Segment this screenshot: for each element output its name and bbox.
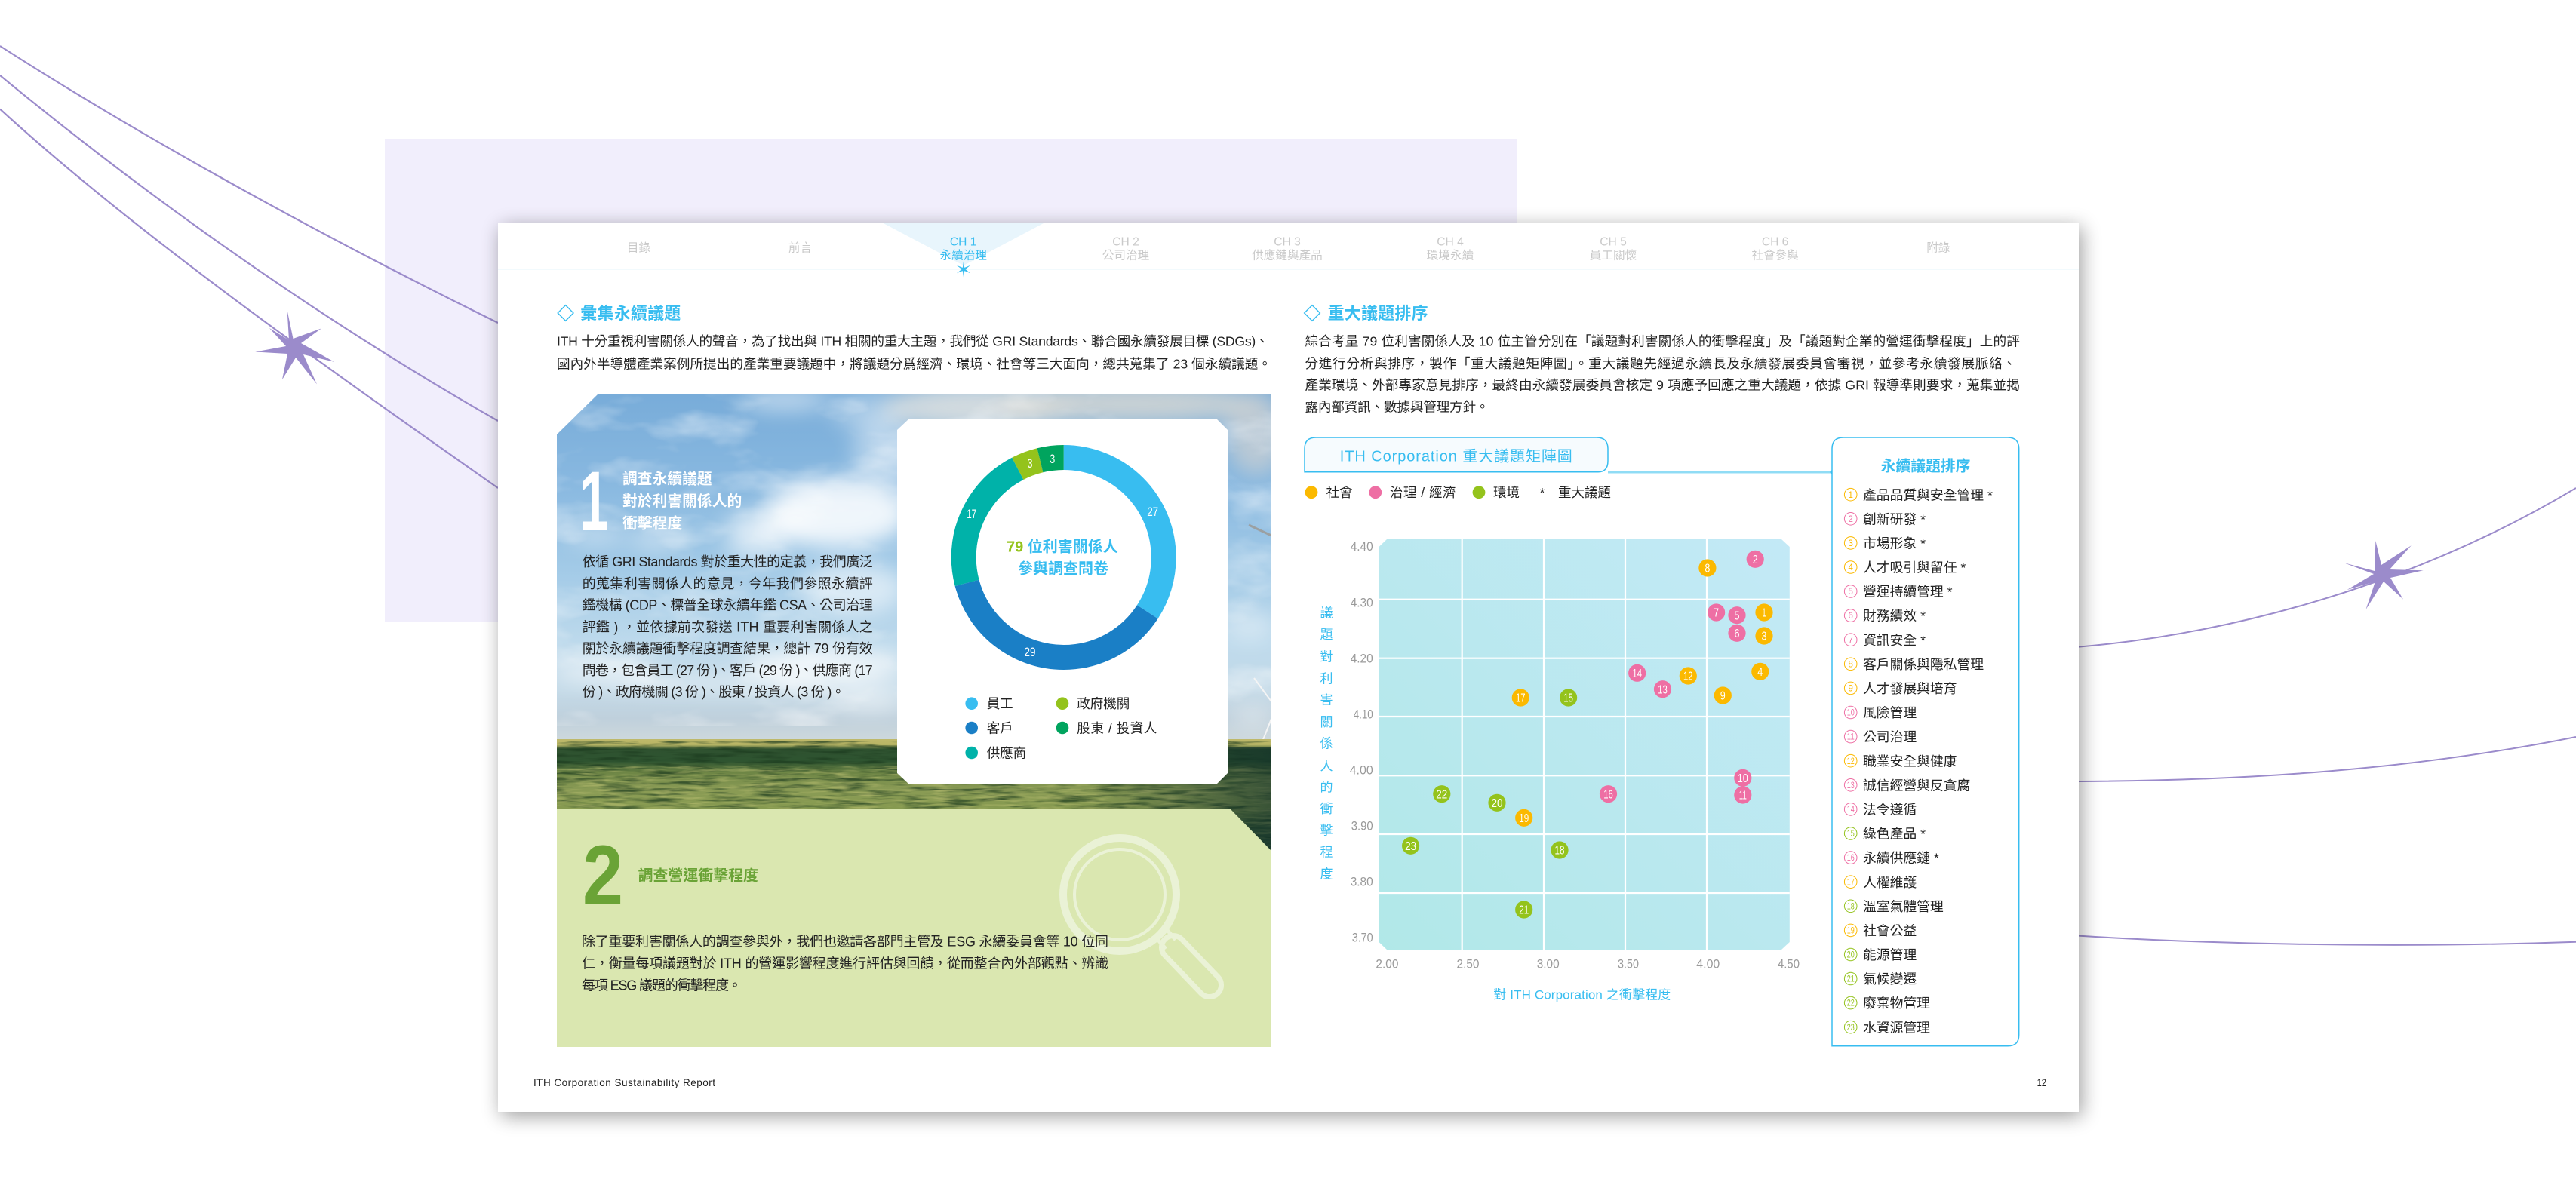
y axis title: 對 [1320,649,1333,664]
point 1: 1 [1763,607,1766,620]
nav item: chapter 1 active: 永續治理 [940,249,987,262]
nav item: preface: 前言 [788,241,812,255]
y axis labels: 3.80 [1351,874,1373,889]
point 14 [1628,664,1646,682]
matrix legend: 社會 [1326,485,1352,500]
item 23: 23 [1847,1024,1855,1033]
item 22: 廢棄物管理 [1863,996,1930,1011]
nav item: chapter 2: 公司治理 [1102,249,1150,262]
matrix legend: * [1539,485,1545,500]
step 2 number: 2 [583,828,623,922]
step 1 text block: 依循 GRI Standards 對於重大性的定義，我們廣泛 [583,554,873,569]
item 3: 3 [1848,539,1853,548]
donut value labels: 17 [967,507,976,521]
point 19 [1515,809,1532,827]
item 1: 1 [1848,491,1853,500]
nav item: chapter 1 active: CH 1 [950,235,976,249]
point 20: 20 [1491,797,1503,810]
donut legend: 員工 [987,696,1013,711]
step 1 text block: 問卷，包含員工 (27 份 )、客戶 (29 份 )、供應商 (17 [583,662,873,678]
icon: right purple star [2344,541,2424,609]
y axis labels: 4.00 [1350,763,1373,777]
nav item: appendix: 附錄 [1926,241,1950,255]
item 1: 產品品質與安全管理 * [1863,487,1993,502]
step 1 text block: 關於永續議題衝擊程度調查結果，總計 79 份有效 [583,641,873,656]
item 3: 市場形象 * [1863,536,1926,551]
scatter chart: materiality matrix [1320,539,1800,1002]
text block: gather topics intro [557,333,1271,371]
y axis title: 議 [1320,606,1333,620]
step 2 heading: 調查營運衝擊程度 [638,867,758,884]
point 21: 21 [1519,904,1529,917]
point 17 [1512,689,1529,707]
donut legend: 政府機關 [1077,696,1130,711]
item 11: 11 [1847,733,1855,742]
nav item: chapter 4: CH 4 [1437,235,1464,249]
point 17: 17 [1516,692,1526,705]
step 1 text block: 鑑機構 (CDP、標普全球永續年鑑 CSA、公司治理 [583,598,873,613]
donut value labels: 3 [1050,452,1055,466]
x axis labels: 2.00 [1376,956,1398,971]
point 5 [1728,606,1746,624]
step 1 heading [622,471,742,533]
item 11: 公司治理 [1863,729,1917,744]
nav item: chapter 1 active [940,235,987,262]
page shadow [501,227,2082,1116]
item 6: 財務績效 * [1863,609,1926,624]
icon: active chapter star [957,261,970,278]
list title: 永續議題排序 [1881,457,1970,475]
item 21: 氣候變遷 [1863,971,1917,987]
step 2 text block [582,934,1108,993]
item 4: 4 [1848,563,1853,572]
step 1 text block: 評鑑 ) ，並依據前次發送 ITH 重要利害關係人之 [583,618,873,634]
y axis title: 衝 [1320,802,1333,816]
y axis title: 害 [1320,693,1333,707]
matrix legend: 重大議題 [1558,485,1611,500]
y axis title: 係 [1320,735,1333,750]
donut legend: 供應商 [987,745,1026,760]
nav item: chapter 2: CH 2 [1112,235,1139,249]
point 22: 22 [1436,788,1447,801]
donut legend: 股東 / 投資人 [1077,721,1157,736]
y axis labels: 4.30 [1351,596,1373,610]
item 15: 綠色產品 * [1863,827,1926,842]
navigation bar [498,223,2079,278]
item 22: 22 [1847,999,1855,1008]
item 23: 水資源管理 [1863,1020,1930,1035]
item 4: 人才吸引與留任 * [1863,560,1966,575]
item 9: 9 [1848,685,1853,694]
point 3 [1755,627,1773,645]
decorative curved lines left [0,46,498,488]
nav item: chapter 5: 員工關懷 [1590,249,1637,262]
text block: gather topics intro: ITH 十分重視利害關係人的聲音，為了找出與 ITH 相關的重大主題，我們從 GRI Standards、聯合國永續發展目標 (SDGs)、 [557,333,1269,348]
point 8: 8 [1705,563,1710,575]
item 5: 營運持續管理 * [1863,585,1953,600]
heading: material topic ranking: 重大議題排序 [1328,304,1428,323]
donut value labels: 3 [1028,456,1032,471]
point 11: 11 [1739,790,1747,803]
x axis labels: 4.00 [1696,956,1720,971]
item 12: 職業安全與健康 [1863,753,1957,769]
item 6: 6 [1848,612,1853,621]
point 7 [1708,603,1725,622]
point 19: 19 [1519,812,1529,825]
point 8 [1698,559,1716,577]
donut legend: 客戶 [987,721,1013,736]
nav item: chapter 5: CH 5 [1600,235,1627,249]
nav item: chapter 6 [1751,235,1799,262]
y axis labels: 4.10 [1354,707,1373,722]
matrix legend: 治理 / 經濟 [1390,485,1456,500]
point 12: 12 [1683,671,1693,683]
step 1 text block: 份 )、政府機關 (3 份 )、股東 / 投資人 (3 份 )。 [583,685,845,700]
item 16: 永續供應鏈 * [1863,850,1939,866]
donut center text: 參與調查問卷 [1018,560,1108,578]
photo: sky and grass with wind turbines [551,385,1286,850]
nav item: chapter 3 [1252,235,1323,262]
donut value labels: 29 [1025,645,1035,659]
point 16: 16 [1603,788,1613,801]
step 2 text block: 每項 ESG 議題的衝擊程度。 [582,978,742,993]
y axis labels: 3.90 [1351,818,1373,833]
text block: gather topics intro: 國內外半導體產業案例所提出的產業重要議題中，將議題分爲經濟、環境、社會等三大面向，總共蒐集了 23 個永續議題。 [557,356,1271,371]
step 1 heading: 對於利害關係人的 [622,493,742,510]
step 2 text block: 仁，衡量每項議題對於 ITH 的營運影響程度進行評估與回饋，從而整合內外部觀點、辨識 [582,956,1108,971]
page [498,223,2079,1112]
panel: step 2 green [557,809,1271,1047]
point 23 [1402,837,1419,855]
item 5: 5 [1848,588,1853,597]
point 6 [1728,625,1746,642]
item 2: 創新研發 * [1863,511,1926,526]
matrix legend: 環境 [1493,485,1520,500]
item 19: 社會公益 [1863,923,1917,938]
point 18: 18 [1554,845,1565,858]
nav item: chapter 3: CH 3 [1274,235,1301,249]
y axis title: 程 [1320,845,1333,859]
item 18: 溫室氣體管理 [1863,899,1944,914]
lavender backdrop panel [385,139,1517,622]
y axis title: 關 [1320,715,1333,729]
point 7: 7 [1714,607,1719,620]
point 3: 3 [1761,631,1767,643]
heading: gather topics: 彙集永續議題 [580,304,681,323]
x axis labels: 3.00 [1537,956,1560,971]
x axis labels: 2.50 [1456,956,1479,971]
y axis labels: 3.70 [1352,930,1373,944]
item 17: 17 [1847,878,1855,887]
nav item: contents: 目錄 [627,241,650,255]
y axis labels [1350,539,1373,944]
step 1 heading: 調查永續議題 [622,471,712,487]
donut legend [965,696,1157,760]
footer page number: 12 [2037,1077,2046,1088]
y axis title [1320,606,1333,881]
point 4: 4 [1757,666,1763,679]
y axis title: 度 [1320,867,1333,881]
y axis title: 利 [1320,671,1333,686]
item 14: 法令遵循 [1863,803,1917,818]
y axis labels: 4.20 [1351,652,1373,666]
text block: ranking intro: 綜合考量 79 位利害關係人及 10 位主管分別在「議題對利害關係人的衝擊程度」及「議題對企業的營運衝擊程度」上的評 [1305,333,2020,348]
step 1 text block [583,554,873,700]
point 11 [1734,786,1751,804]
text block: ranking intro: 露內部資訊、數據與管理方針。 [1305,400,1489,415]
item 17: 人權維護 [1863,875,1917,890]
y axis title: 題 [1320,628,1333,642]
item 15: 15 [1847,830,1855,839]
item 20: 能源管理 [1863,947,1917,962]
nav item: chapter 3: 供應鏈與產品 [1252,247,1323,262]
item 10: 10 [1847,709,1855,718]
item 8: 8 [1848,660,1853,669]
item 20: 20 [1847,951,1855,960]
data points [1402,551,1773,919]
point 9: 9 [1720,690,1726,703]
point 20 [1488,794,1506,812]
item 7: 資訊安全 * [1863,633,1926,648]
panel: donut chart card [897,419,1228,784]
panel: sustainability topic ranking list [1832,437,2019,1046]
y axis title: 擊 [1320,823,1333,837]
item 21: 21 [1847,975,1855,984]
matrix title tab: ITH Corporation 重大議題矩陣圖 [1340,448,1572,465]
donut value labels: 27 [1147,505,1158,519]
point 2 [1747,551,1764,568]
icon: magnifying glass [1063,838,1222,997]
nav item: chapter 2 [1102,235,1150,262]
donut chart [964,457,1164,658]
donut value labels [967,452,1158,659]
donut center text: 79 位利害關係人 [1007,537,1118,555]
y axis labels: 4.40 [1351,539,1373,554]
point 14: 14 [1632,668,1642,680]
item 10: 風險管理 [1863,705,1917,720]
item 13: 13 [1847,781,1855,790]
point 21 [1515,901,1532,919]
point 6: 6 [1734,628,1740,640]
icon: left purple star [255,310,334,384]
nav item: chapter 5 [1590,235,1637,262]
matrix title tab [1305,437,1608,472]
x axis labels [1376,956,1800,971]
x axis title: 對 ITH Corporation 之衝擊程度 [1493,988,1671,1002]
point 12 [1680,667,1697,685]
point 13 [1654,680,1671,698]
decorative curved lines right [2079,488,2576,945]
point 13: 13 [1658,683,1668,696]
step 1 text block: 的蒐集利害關係人的意見，今年我們參照永續評 [583,575,873,591]
y axis title: 的 [1320,781,1333,795]
donut center text [1007,537,1118,578]
point 15: 15 [1563,692,1573,705]
point 4 [1751,663,1769,680]
matrix legend [1305,485,1611,500]
item 14: 14 [1847,806,1855,815]
point 5: 5 [1734,609,1740,622]
plot area [1379,539,1790,950]
text block: ranking intro [1305,333,2020,415]
point 23: 23 [1405,840,1416,853]
point 22 [1433,785,1450,803]
point 2: 2 [1753,554,1758,566]
step 2 text block: 除了重要利害關係人的調查參與外，我們也邀請各部門主管及 ESG 永續委員會等 10 位同 [582,934,1108,949]
footer report title: ITH Corporation Sustainability Report [533,1077,715,1088]
item 18: 18 [1847,902,1855,911]
item 16: 16 [1847,854,1855,863]
item 13: 誠信經營與反貪腐 [1863,778,1970,793]
nav item: chapter 6: CH 6 [1762,235,1788,249]
nav item: chapter 4 [1427,235,1474,262]
point 10 [1734,769,1751,787]
item 19: 19 [1847,926,1855,935]
item 12: 12 [1847,757,1855,766]
step 1 heading: 衝擊程度 [622,514,682,533]
item 7: 7 [1848,636,1853,645]
point 15 [1560,689,1577,707]
item 8: 客戶關係與隱私管理 [1863,656,1984,672]
y axis title: 人 [1320,759,1333,773]
item 2: 2 [1848,515,1853,524]
item 9: 人才發展與培育 [1863,681,1957,696]
x axis labels: 4.50 [1778,956,1800,971]
nav item: chapter 4: 環境永續 [1427,247,1474,262]
text block: ranking intro: 產業環境、外部專家意見排序，最終由永續發展委員會核定 9 項應予回應之重大議題，依據 GRI 報導準則要求，蒐集並揭 [1305,377,2020,392]
point 16 [1600,785,1617,803]
text block: ranking intro: 分進行分析與排序，製作「重大議題矩陣圖」。重大議題先經過永續長及永續發展委員會審視，並參考永續發展脈絡、 [1305,356,2016,371]
nav item: chapter 6: 社會參與 [1751,249,1799,262]
step 1 number: 1 [579,454,609,548]
point 9 [1714,686,1732,704]
x axis labels: 3.50 [1618,956,1639,971]
connector line to ranking list [1608,471,1834,474]
point 1 [1755,603,1773,622]
point 10: 10 [1738,772,1748,785]
point 18 [1551,841,1569,859]
